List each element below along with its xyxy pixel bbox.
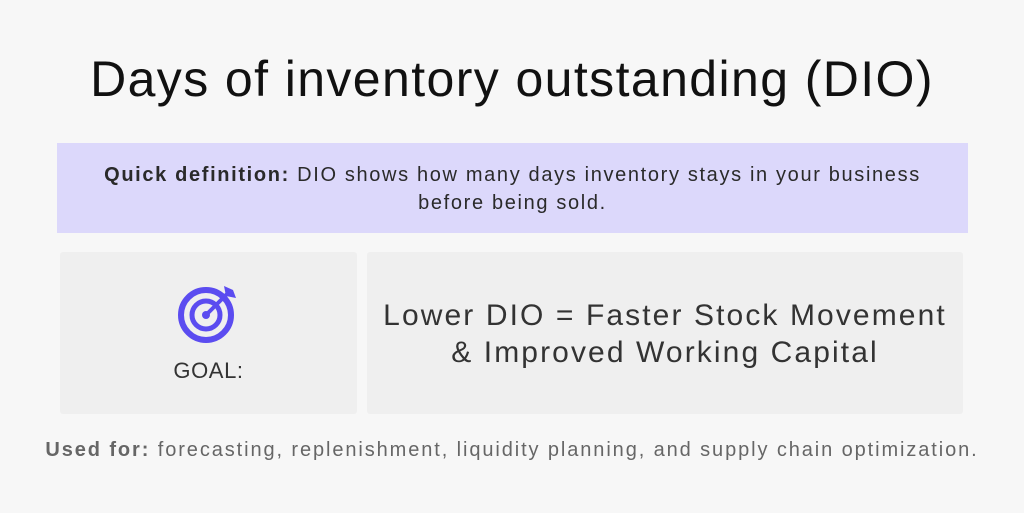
panel: definition: Quick definition: DIO shows how many days inventory stays in your business (104, 164, 921, 186)
panel: goal statement: Lower DIO = Faster Stock Movement (383, 299, 947, 332)
panel: definition: before being sold. (418, 192, 607, 214)
panel: goal statement (367, 252, 963, 414)
icon: target (178, 286, 236, 343)
used for text: Used for: forecasting, replenishment, liquidity planning, and supply chain optimization. (45, 439, 979, 461)
panel: goal (60, 252, 357, 414)
panel: goal statement: & Improved Working Capital (451, 336, 879, 369)
title: Days of inventory outstanding (DIO) (90, 51, 934, 107)
panel: definition (57, 143, 968, 233)
goal label: GOAL: (173, 358, 244, 383)
